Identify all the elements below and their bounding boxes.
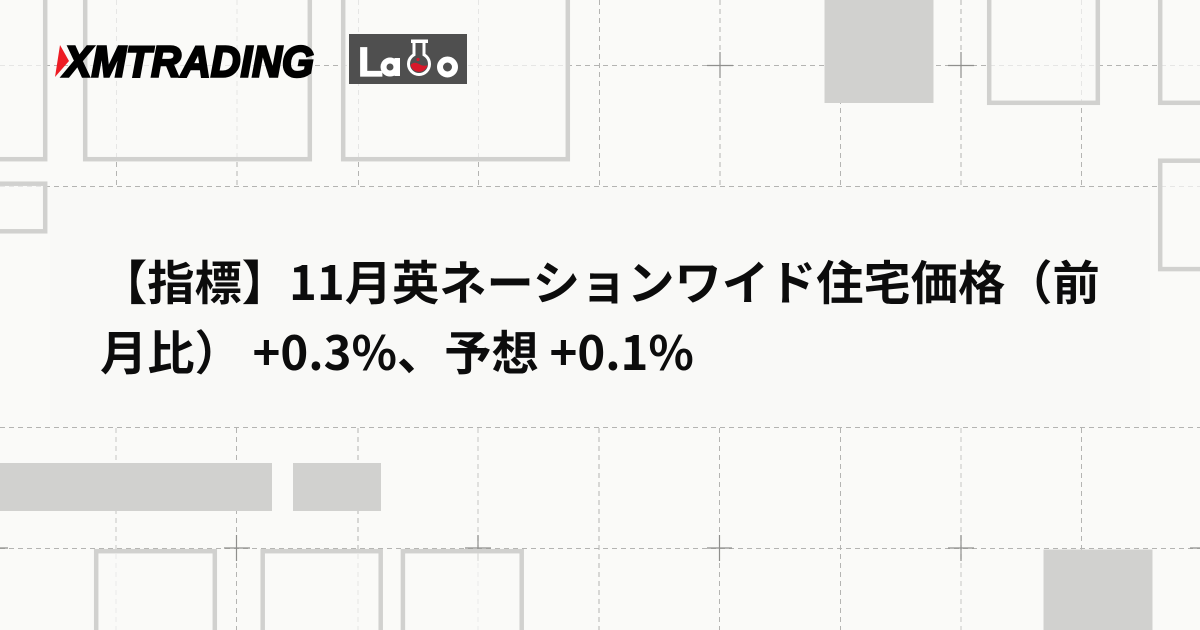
title: 月比） +0.3%、予想 +0.1% (100, 315, 694, 384)
title panel background (50, 187, 1150, 427)
logo: XMTRADING: XMTRADING (61, 38, 314, 86)
letter o (440, 60, 455, 74)
icon: flask (408, 40, 430, 74)
logo: Lab (349, 34, 467, 85)
title: 【指標】11月英ネーションワイド住宅価格（前 (100, 245, 1100, 314)
letter a (384, 58, 400, 76)
title (100, 245, 1100, 384)
logo: Lab: L (358, 39, 383, 85)
logos (55, 34, 467, 86)
